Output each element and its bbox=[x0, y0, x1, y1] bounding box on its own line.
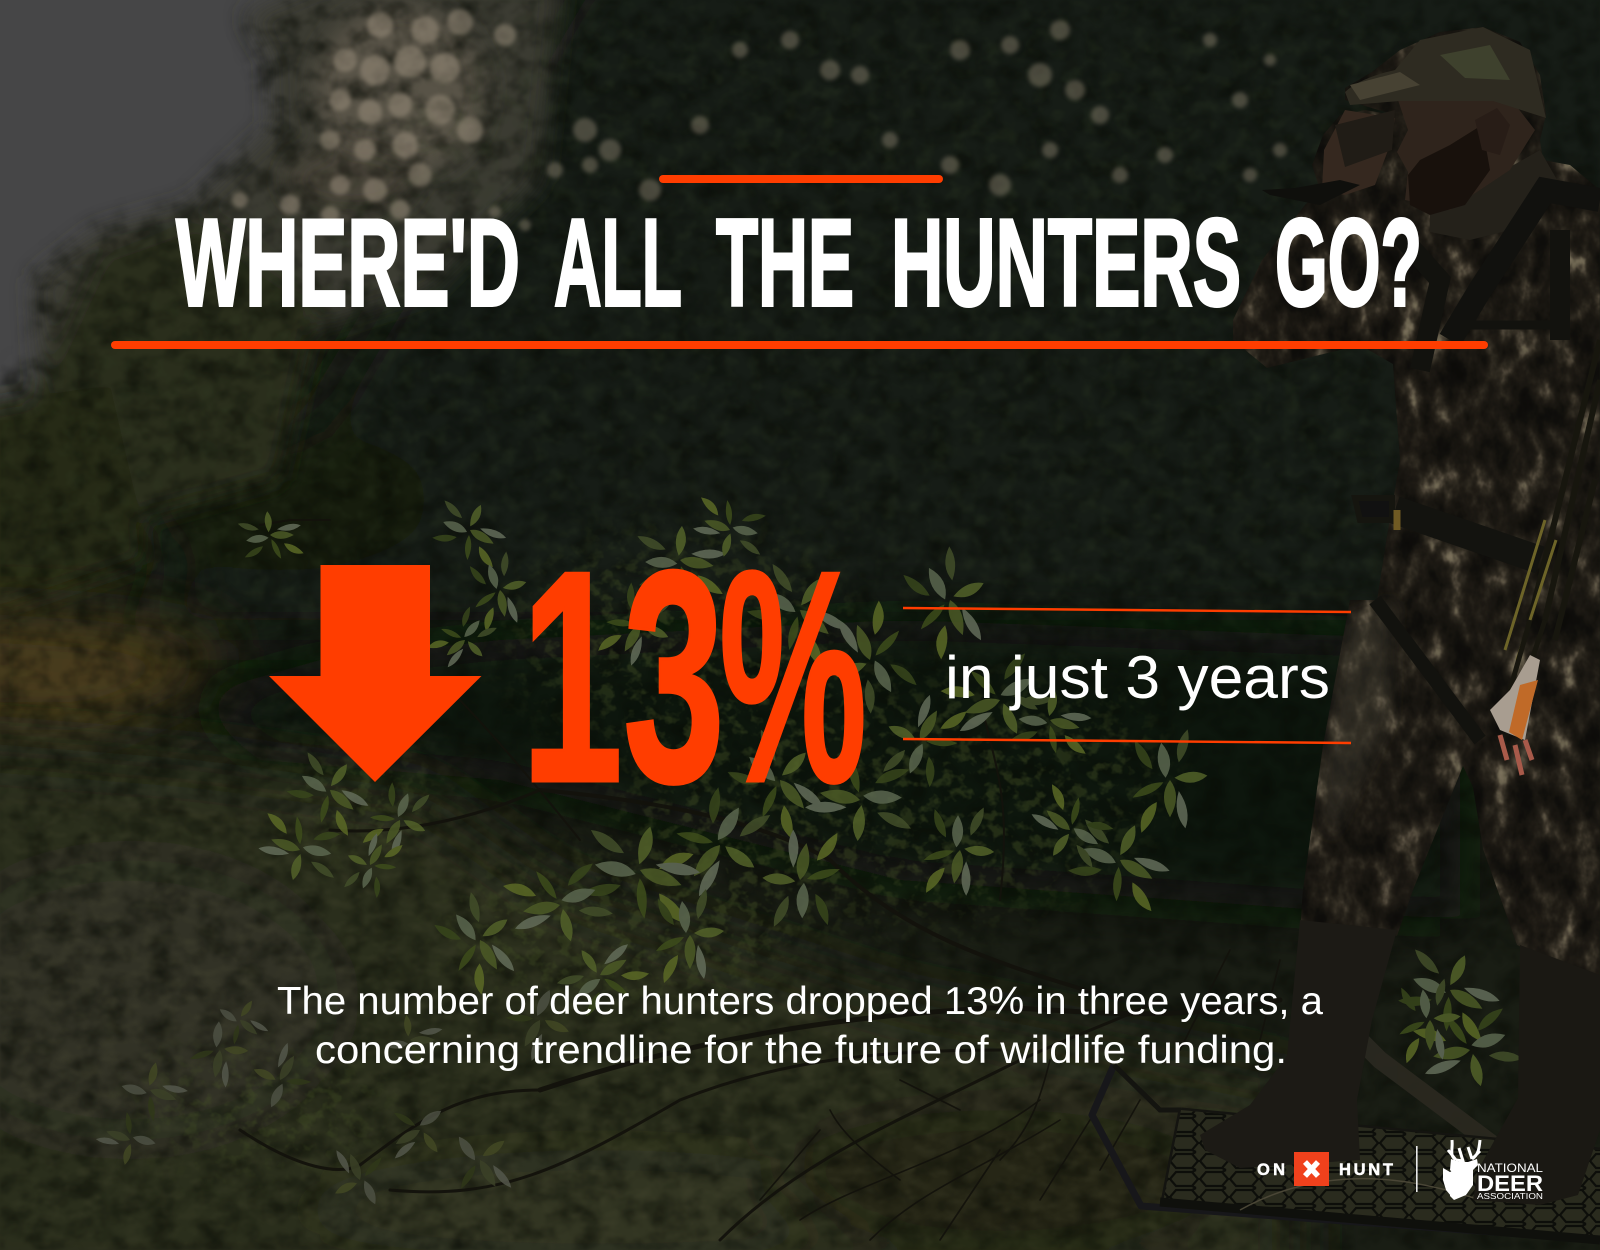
title underline bbox=[111, 341, 1488, 349]
icon: deer head bbox=[1443, 1140, 1480, 1200]
icon: down arrow bbox=[269, 565, 482, 782]
top accent line bbox=[659, 175, 943, 183]
logo: onX Hunt: HUNT bbox=[1339, 1161, 1393, 1179]
grass bbox=[0, 740, 1300, 1250]
logo: National Deer Association: DEER bbox=[1477, 1171, 1543, 1196]
hunter harness, straps and belt bbox=[1355, 190, 1600, 740]
pale blossom mass bbox=[285, 5, 485, 215]
big stat: 13%: % bbox=[719, 508, 867, 845]
fletchings bbox=[1490, 655, 1540, 775]
hunter right boot bbox=[1473, 945, 1600, 1205]
hunter left boot bbox=[1200, 920, 1397, 1168]
bare branches bbox=[240, 520, 1500, 1240]
description text: concerning trendline for the future of wildlife funding. bbox=[315, 1029, 1287, 1072]
logo: onX Hunt: ON bbox=[1257, 1161, 1285, 1179]
description text: The number of deer hunters dropped 13% in three years, a bbox=[277, 980, 1323, 1023]
hunter neck gaiter bbox=[1430, 150, 1560, 240]
title: HUNTERS bbox=[891, 194, 1241, 332]
logo: National Deer Association bbox=[1443, 1140, 1543, 1201]
title: WHERE'D bbox=[176, 194, 520, 332]
hunter body bbox=[1233, 28, 1600, 973]
title: THE bbox=[716, 194, 854, 332]
sky bbox=[0, 0, 420, 420]
logo: National Deer Association: NATIONAL bbox=[1477, 1161, 1543, 1175]
logo divider bbox=[1416, 1146, 1418, 1192]
hunter face and beard bbox=[1262, 98, 1535, 215]
title: GO? bbox=[1275, 194, 1422, 332]
title: ALL bbox=[554, 194, 682, 332]
bokeh highlights bbox=[232, 9, 516, 224]
logo: onX Hunt bbox=[1257, 1152, 1393, 1186]
big stat: 13%: 13 bbox=[521, 508, 725, 845]
leaf clusters bbox=[91, 488, 1526, 1216]
description text bbox=[277, 980, 1323, 1072]
pale tree canopy bbox=[0, 0, 560, 620]
logo: National Deer Association: ASSOCIATION bbox=[1477, 1192, 1543, 1201]
callout: in just 3 years: in just 3 years bbox=[945, 644, 1330, 711]
hunter cap camo bbox=[1345, 27, 1546, 118]
tree stand bbox=[1092, 1065, 1600, 1245]
dark upper forest bbox=[120, 0, 1600, 640]
dark shrubs behind the field bbox=[180, 620, 1460, 920]
golden field bbox=[0, 612, 220, 730]
arrows in bow quiver bbox=[1505, 340, 1600, 690]
callout: in just 3 years bbox=[903, 608, 1351, 743]
title bbox=[176, 194, 1422, 332]
